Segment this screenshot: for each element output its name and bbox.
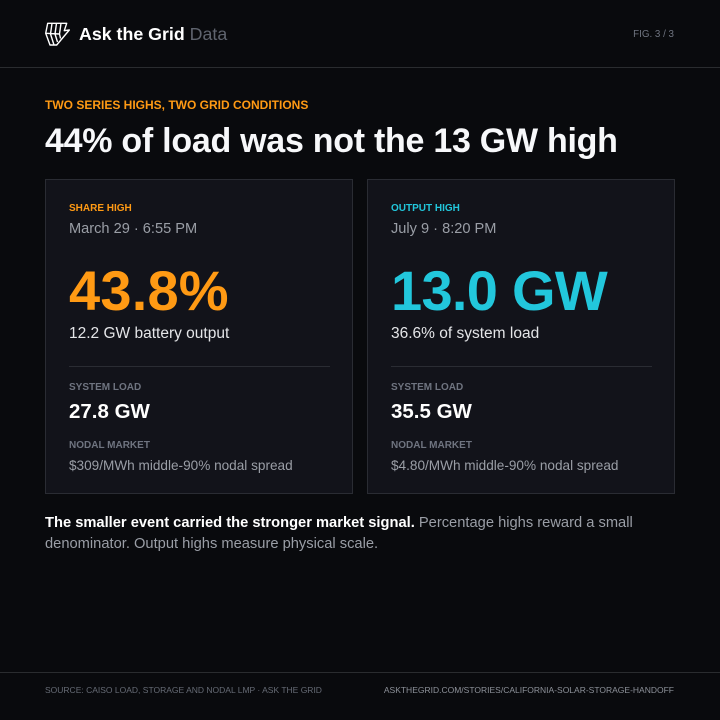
icon: lightning grid logo <box>45 22 70 46</box>
takeaway text: denominator. Output highs measure physical scale. <box>45 536 378 552</box>
source: SOURCE: CAISO LOAD, STORAGE AND NODAL LMP · ASK THE GRID <box>45 685 322 695</box>
nodal spread: $4.80/MWh middle-90% nodal spread <box>391 458 618 473</box>
nodal market label: NODAL MARKET <box>69 440 150 451</box>
system load label: SYSTEM LOAD <box>69 382 141 393</box>
url: ASKTHEGRID.COM/STORIES/CALIFORNIA-SOLAR-STORAGE-HANDOFF <box>384 685 674 695</box>
brand name: Ask the Grid Data <box>79 24 227 44</box>
footer <box>0 672 720 720</box>
system load value: 35.5 GW <box>391 400 472 423</box>
takeaway text: The smaller event carried the stronger market signal. Percentage highs reward a small <box>45 515 633 531</box>
title: 44% of load was not the 13 GW high <box>45 122 618 160</box>
eyebrow: TWO SERIES HIGHS, TWO GRID CONDITIONS <box>45 98 308 112</box>
panel label: OUTPUT HIGH <box>391 202 460 214</box>
date: March 29 · 6:55 PM <box>69 221 197 237</box>
panel: output high <box>367 179 675 494</box>
system load label: SYSTEM LOAD <box>391 382 463 393</box>
big number: 43.8% <box>69 259 229 322</box>
panel label: SHARE HIGH <box>69 202 132 214</box>
takeaway text <box>45 515 633 552</box>
date: July 9 · 8:20 PM <box>391 221 496 237</box>
system load value: 27.8 GW <box>69 400 150 423</box>
nodal spread: $309/MWh middle-90% nodal spread <box>69 458 293 473</box>
header <box>0 0 720 68</box>
big number: 13.0 GW <box>391 259 607 322</box>
battery output: 12.2 GW battery output <box>69 325 229 342</box>
figure number: FIG. 3 / 3 <box>633 29 674 40</box>
nodal market label: NODAL MARKET <box>391 440 472 451</box>
system share: 36.6% of system load <box>391 325 539 342</box>
panel: share high <box>45 179 353 494</box>
